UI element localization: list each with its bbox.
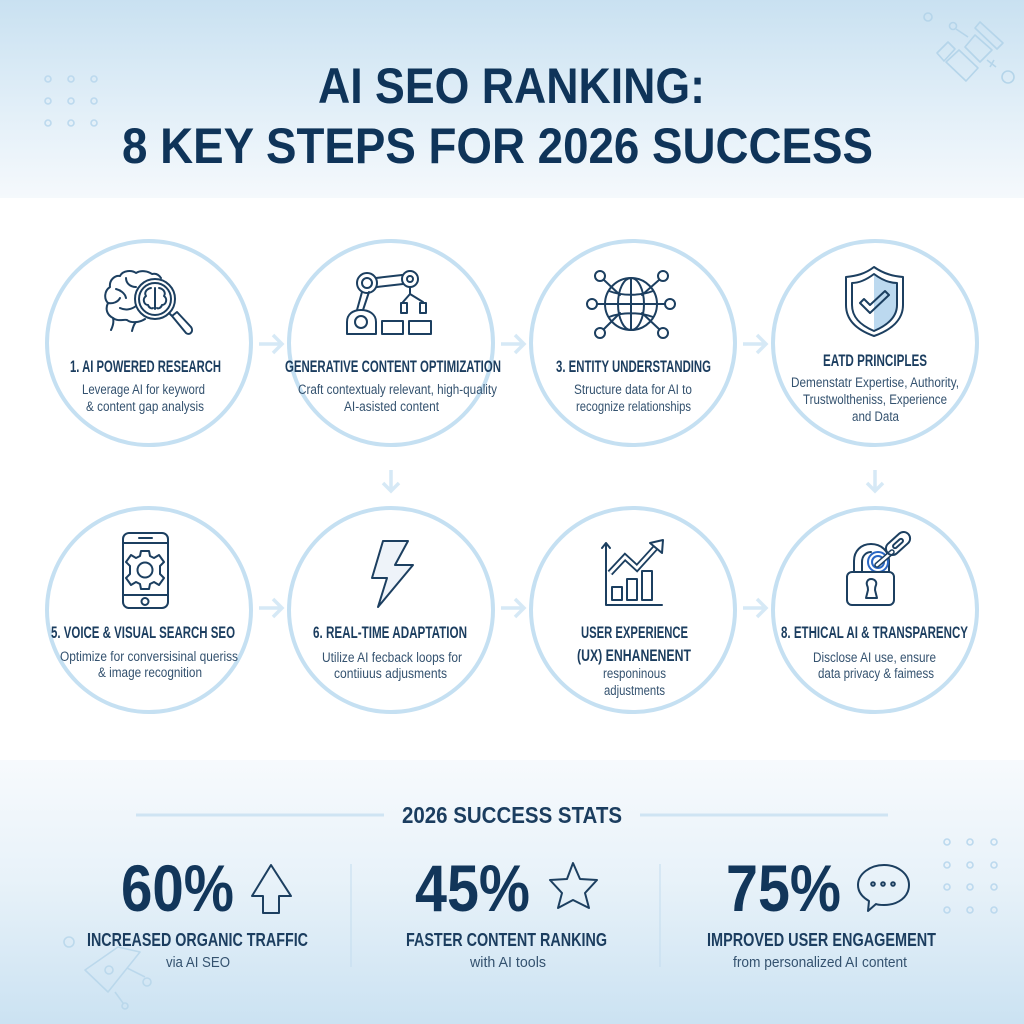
stat: 75%: [707, 851, 936, 971]
description: Utilize AI fecback loops for: [322, 650, 462, 665]
heading: 5. VOICE & VISUAL SEARCH SEO: [51, 624, 235, 642]
icon: lightning bolt: [372, 541, 413, 607]
stat: 45%: FASTER CONTENT RANKING: [406, 930, 607, 950]
decorative dot grid: bottom right: [944, 839, 997, 913]
header band: [0, 0, 1024, 198]
stats heading: 2026 SUCCESS STATS: [402, 802, 622, 828]
stats heading: [136, 802, 888, 828]
description: [82, 382, 205, 414]
description: & content gap analysis: [86, 399, 204, 414]
heading: (UX) ENHANENENT: [577, 647, 691, 665]
heading: GENERATIVE CONTENT OPTIMIZATION: [285, 358, 501, 376]
step 1 panel: [47, 241, 251, 445]
heading: USER EXPERIENCE: [581, 624, 688, 642]
stats band: [0, 760, 1024, 1024]
description: Trustwoltheniss, Experience: [803, 392, 947, 407]
description: Disclose AI use, ensure: [813, 650, 936, 665]
icon: up arrow: [252, 865, 291, 913]
description: & image recognition: [98, 665, 202, 680]
description: Structure data for AI to: [574, 382, 692, 397]
stat: 60%: 60%: [121, 851, 234, 925]
description: Demenstatr Expertise, Authority,: [791, 375, 959, 390]
description: and Data: [852, 409, 899, 424]
description: Craft contextualy relevant, high-quality: [298, 382, 497, 397]
description: [574, 382, 692, 414]
description: contiiuus adjusments: [334, 666, 447, 681]
heading: [577, 624, 691, 665]
title: [122, 58, 873, 174]
decorative satellite: top right: [924, 13, 1014, 83]
description: [298, 382, 497, 414]
heading: 1. AI POWERED RESEARCH: [70, 358, 221, 376]
description: [791, 375, 959, 424]
heading: 6. REAL-TIME ADAPTATION: [313, 624, 467, 642]
icon: brain with magnifier: [105, 271, 192, 334]
description: responinous: [603, 666, 666, 681]
description: data privacy & faimess: [818, 666, 934, 681]
stat: 60%: [87, 851, 308, 971]
step 5 panel: [47, 508, 251, 712]
description: [813, 650, 936, 681]
icon: growth chart: [602, 540, 663, 605]
description: AI-asisted content: [344, 399, 439, 414]
stat: 45%: 45%: [415, 851, 530, 925]
step 3 panel: [531, 241, 735, 445]
flow arrows: [259, 335, 883, 617]
stat: 60%: INCREASED ORGANIC TRAFFIC: [87, 930, 308, 950]
decorative dot grid: top left: [45, 76, 97, 126]
icon: robot arm: [347, 271, 431, 334]
stat: 60%: via AI SEO: [166, 954, 230, 971]
stat: 75%: from personalized AI content: [733, 954, 908, 971]
stat: 45%: with AI tools: [469, 954, 546, 971]
icon: padlock with chain link: [847, 529, 913, 605]
heading: 3. ENTITY UNDERSTANDING: [556, 358, 711, 376]
heading: EATD PRINCIPLES: [823, 352, 927, 370]
title: 8 KEY STEPS FOR 2026 SUCCESS: [122, 118, 873, 174]
stat: 75%: IMPROVED USER ENGAGEMENT: [707, 930, 936, 950]
description: Optimize for conversisinal queriss: [60, 649, 238, 664]
step 2 panel: [285, 241, 501, 445]
description: Leverage AI for keyword: [82, 382, 205, 397]
icon: shield with check: [846, 267, 903, 336]
decorative device: bottom left: [64, 937, 151, 1009]
stat: 45%: [406, 851, 607, 971]
stat: 75%: 75%: [726, 851, 841, 925]
step 6 panel: [289, 508, 493, 712]
description: adjustments: [604, 683, 665, 698]
description: recognize relationships: [576, 399, 691, 414]
step 8 panel: [773, 508, 977, 712]
description: [60, 649, 238, 680]
icon: phone with gear: [123, 533, 168, 608]
step 7 panel: [531, 508, 735, 712]
title: AI SEO RANKING:: [318, 58, 705, 114]
icon: network globe: [587, 271, 675, 338]
description: [322, 650, 462, 681]
icon: speech bubble: [858, 865, 909, 911]
icon: star: [550, 863, 597, 908]
step 4 panel: [773, 241, 977, 445]
description: [603, 666, 666, 698]
